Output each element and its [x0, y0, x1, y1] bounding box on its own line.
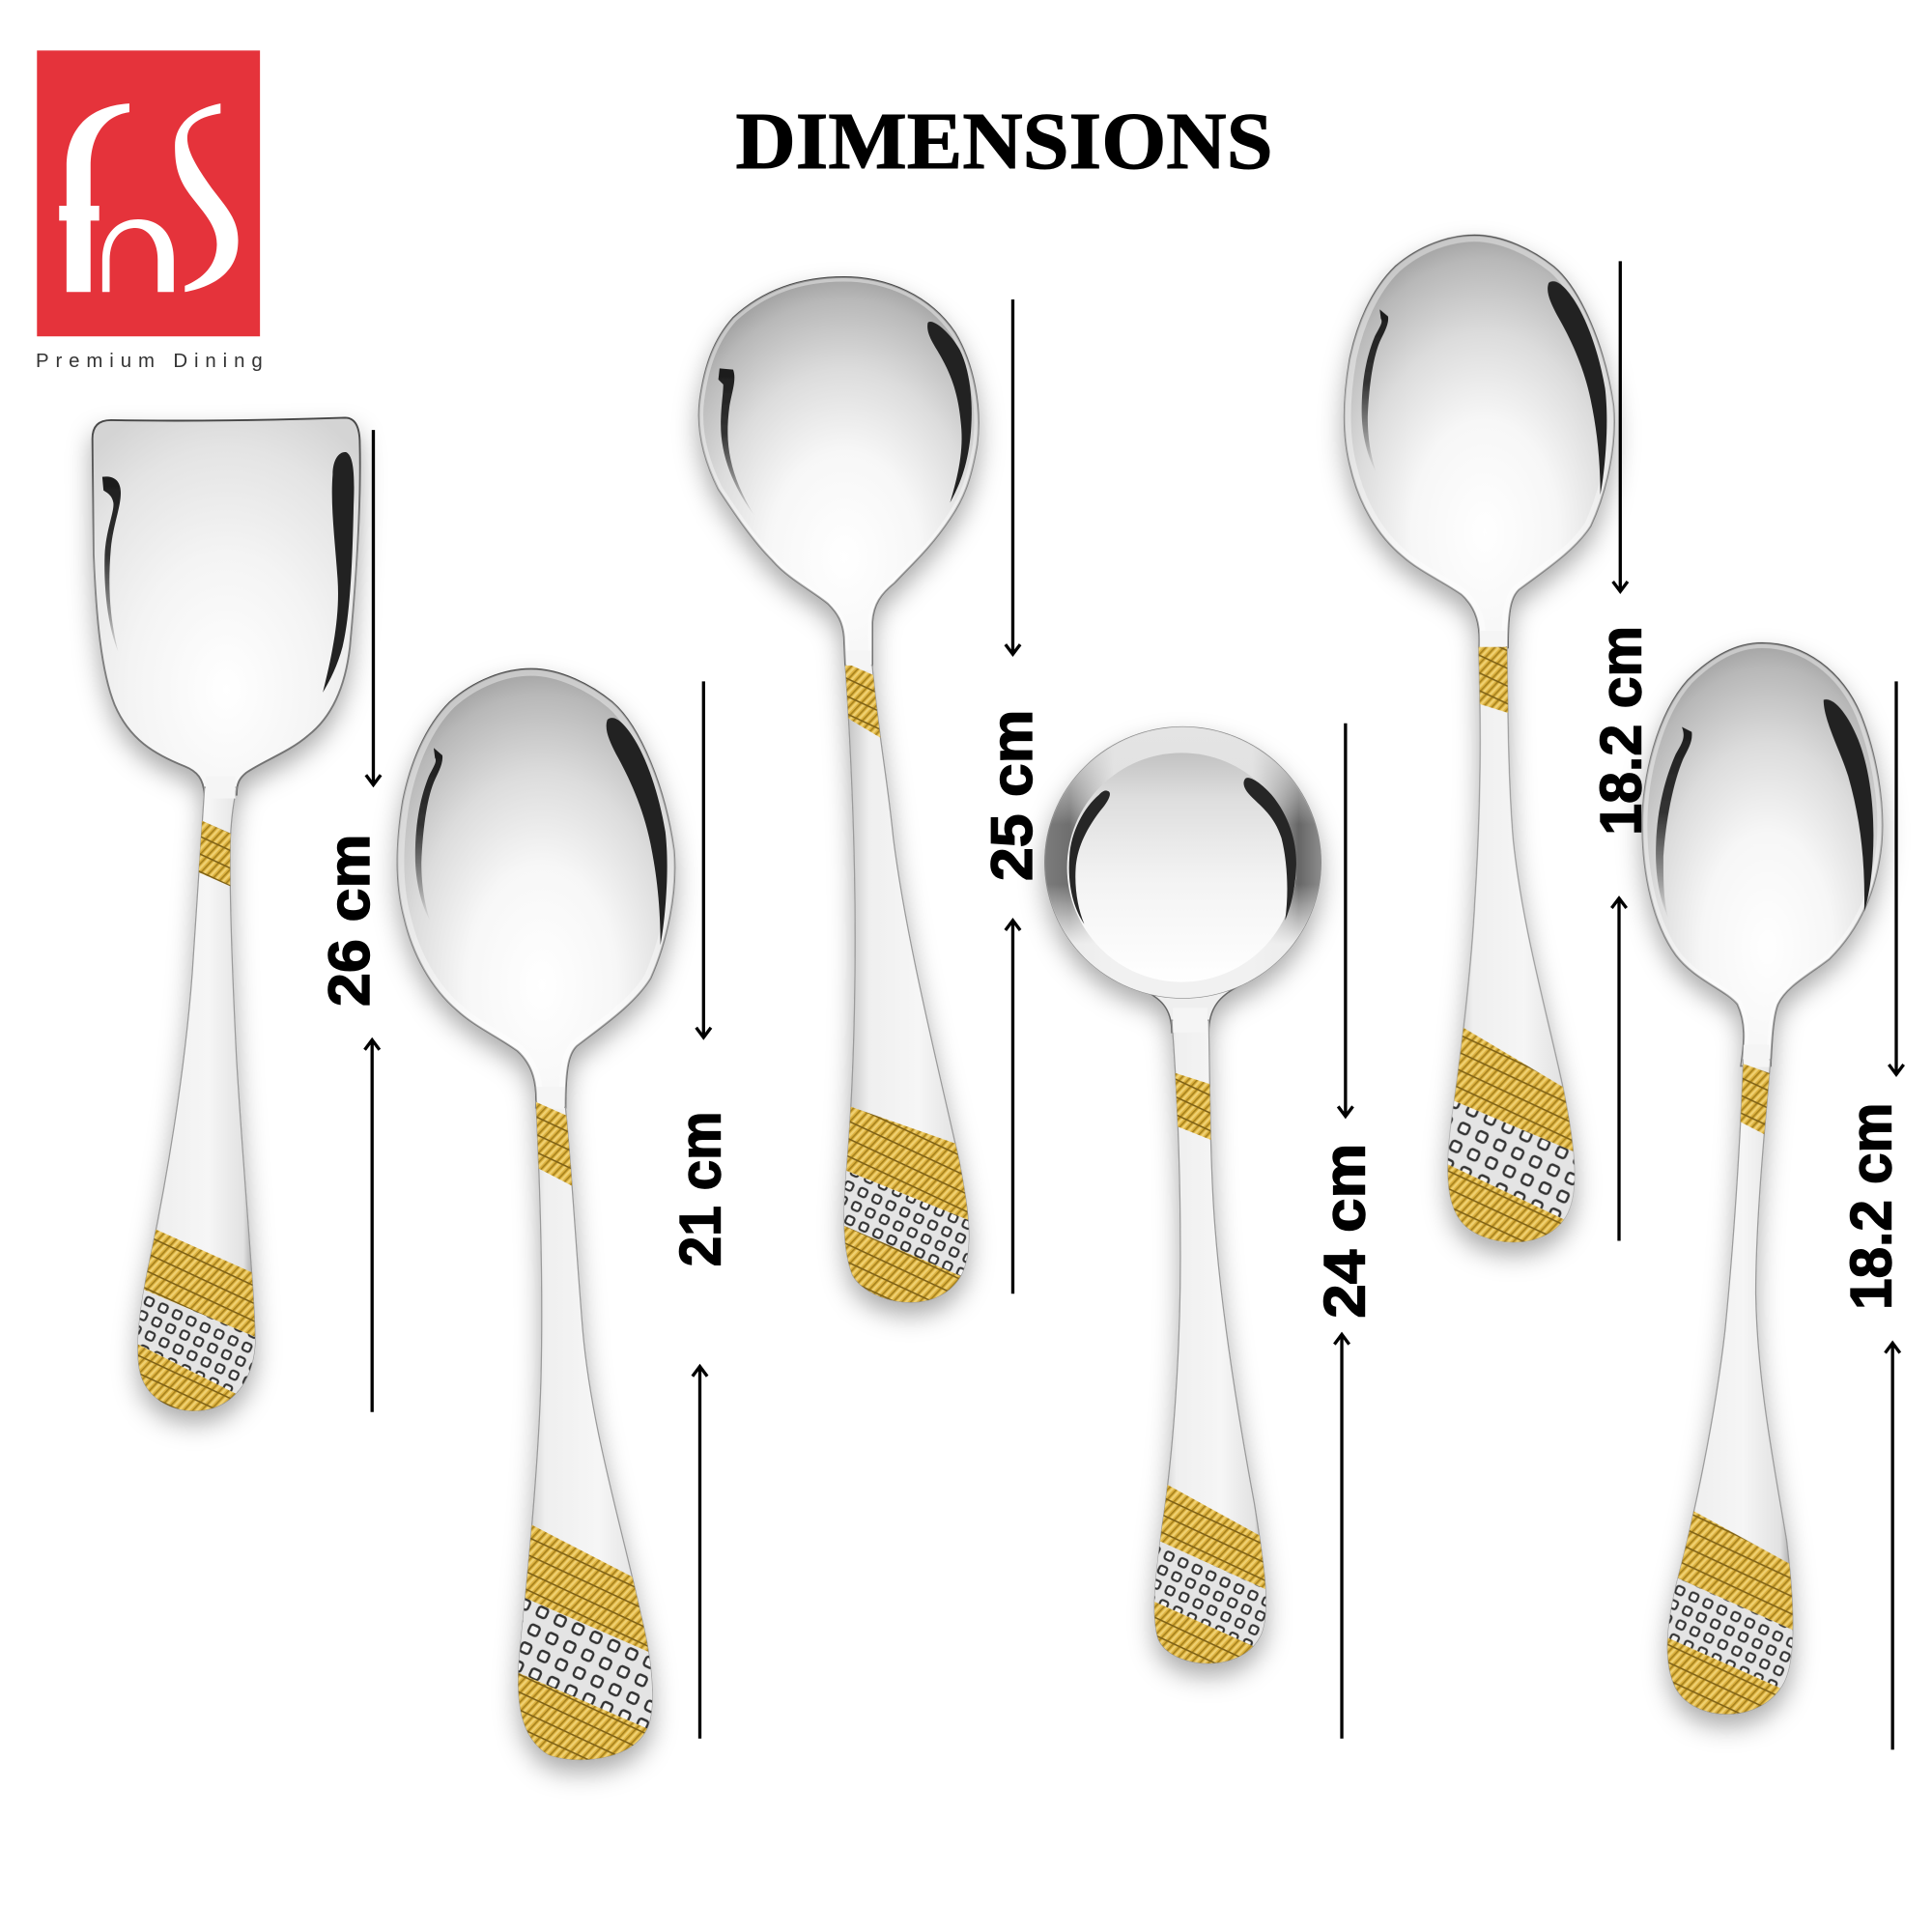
label: 24 cm [1313, 1144, 1378, 1319]
handle pattern bands [1667, 1064, 1793, 1714]
ladle bowl [1067, 753, 1296, 982]
arrow up [1334, 1334, 1350, 1739]
dimension: large spoon 21 cm [668, 681, 733, 1739]
arrow down [696, 681, 711, 1037]
ladle neck [1140, 985, 1239, 1033]
ladle rim [1045, 727, 1321, 998]
head [1642, 643, 1883, 1065]
neck join [206, 777, 236, 799]
head [699, 277, 979, 666]
title: DIMENSIONS [735, 97, 1273, 186]
arrow up [1611, 898, 1627, 1240]
neck join [1744, 1045, 1770, 1067]
label: 25 cm [980, 710, 1044, 881]
neck join [1480, 631, 1506, 649]
brand logo [37, 50, 260, 336]
spoon: large serving spoon [398, 669, 697, 1848]
arrow up [1006, 921, 1020, 1293]
handle pattern bands [1447, 647, 1575, 1242]
arrow up [1886, 1343, 1900, 1749]
dimension: spatula 26 cm [317, 430, 382, 1412]
handle [844, 666, 969, 1302]
spoon: round serving spoon [699, 277, 1016, 1392]
handle pattern bands [518, 1101, 653, 1760]
dimension: tall spoon 18.2 cm [1588, 261, 1653, 1240]
head reflections [102, 452, 355, 693]
arrow down [1613, 261, 1628, 591]
spoon: spatula server [91, 417, 360, 1503]
arrow up [693, 1367, 707, 1739]
handle pattern bands [1154, 1072, 1265, 1663]
label: 18.2 cm [1588, 626, 1653, 836]
dimension: ladle 24 cm [1313, 724, 1378, 1739]
neck join [846, 650, 871, 670]
handle pattern bands [137, 821, 255, 1410]
dimension: dessert spoon 18.2 cm [1838, 681, 1904, 1749]
neck join [1173, 1008, 1208, 1033]
spoon: dessert spoon [1620, 643, 1883, 1799]
arrow down [1006, 299, 1020, 654]
handle pattern bands [844, 665, 969, 1302]
handle [519, 1101, 652, 1760]
head rim highlight [1642, 643, 1883, 1065]
head rim highlight [398, 669, 674, 1108]
head [398, 669, 674, 1108]
handle [1448, 647, 1575, 1242]
head rim highlight [699, 277, 979, 666]
head [93, 417, 360, 795]
logo monogram fns [59, 103, 238, 292]
label: 21 cm [668, 1112, 733, 1266]
head [1345, 236, 1614, 647]
handle [1667, 1060, 1793, 1714]
head reflections [1656, 699, 1873, 918]
label: 18.2 cm [1838, 1103, 1903, 1310]
arrow down [1889, 681, 1904, 1074]
arrow down [366, 430, 381, 784]
label: 26 cm [317, 835, 382, 1007]
handle [1154, 1020, 1265, 1663]
arrow up [365, 1040, 380, 1412]
head reflections [719, 322, 972, 515]
spoon: soup ladle [1045, 727, 1321, 1749]
spoon: tall serving spoon [1345, 236, 1624, 1331]
arrow down [1338, 724, 1353, 1117]
head reflections [415, 718, 668, 945]
logo tagline: Premium Dining [36, 351, 263, 372]
handle [138, 787, 255, 1411]
bowl reflections [1069, 778, 1296, 924]
neck join [537, 1087, 564, 1109]
dimension: round spoon 25 cm [980, 299, 1044, 1293]
